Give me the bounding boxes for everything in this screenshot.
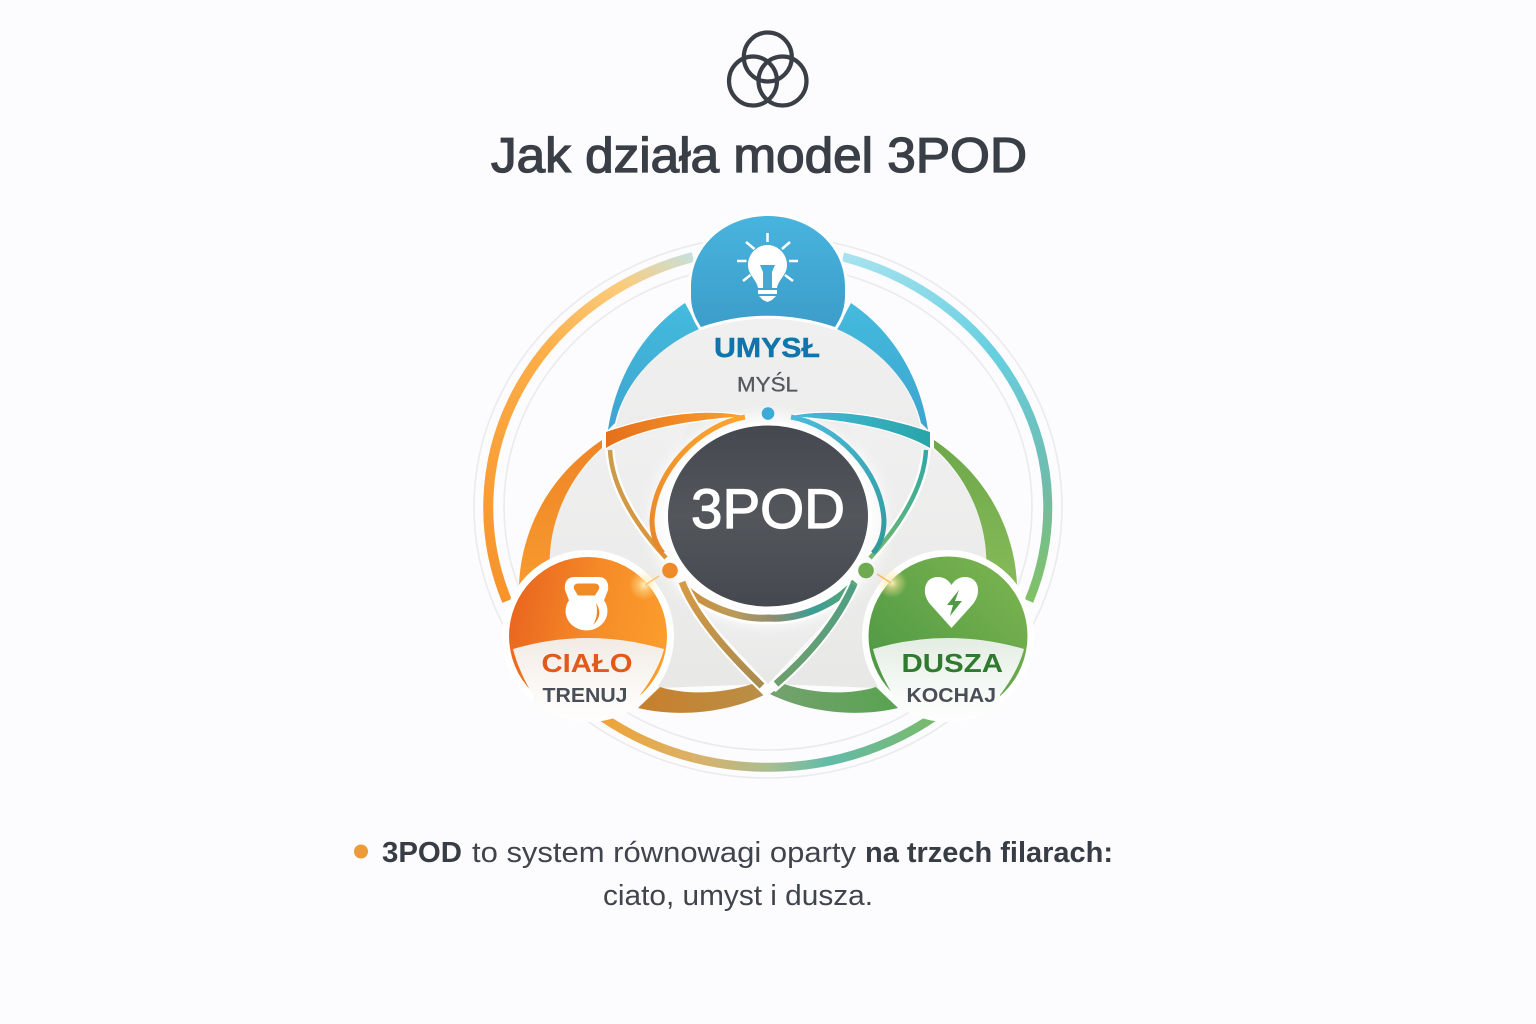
strand: thin orange around centre bbox=[652, 417, 745, 553]
crescent: blue petal left bbox=[608, 303, 699, 430]
crescent: bottom green bbox=[770, 684, 898, 713]
label: TRENUJ: TRENUJ bbox=[542, 685, 628, 707]
centre circle: 3POD bbox=[668, 426, 868, 606]
blue cap bbox=[691, 216, 845, 327]
description text: 3POD bbox=[382, 837, 462, 869]
white glow around the centre bbox=[650, 414, 886, 626]
description text bbox=[382, 837, 1113, 912]
description text: to system równowagi oparty bbox=[472, 837, 857, 869]
band: teal top arc bbox=[791, 413, 930, 448]
label: DUSZA: DUSZA bbox=[902, 648, 1003, 678]
arc: bottom gradient ring segment bbox=[590, 708, 946, 767]
pillar: CIAŁO bbox=[502, 550, 674, 726]
icon: heart with bolt bbox=[925, 577, 978, 628]
petal fills: grey interior areas bbox=[550, 316, 986, 688]
label: KOCHAJ: KOCHAJ bbox=[906, 685, 996, 707]
white halo bbox=[862, 550, 1034, 722]
dot and spark: green node bbox=[858, 563, 907, 598]
dot and spark: orange node bbox=[629, 563, 678, 600]
label: UMYSŁ: UMYSŁ bbox=[714, 332, 820, 363]
band: orange top arc bbox=[606, 413, 745, 448]
label: MYŚL: MYŚL bbox=[737, 372, 798, 396]
icon: light bulb bbox=[737, 233, 798, 302]
diagram: 3POD model bbox=[474, 216, 1062, 778]
orange disc bbox=[509, 557, 667, 715]
pillar: DUSZA bbox=[862, 550, 1034, 726]
crescent: blue petal right bbox=[837, 303, 928, 430]
white halo bbox=[502, 550, 674, 722]
strand: tan arc of the mind petal, left bbox=[610, 450, 666, 558]
crescent: orange petal outer bbox=[519, 440, 602, 585]
strand: bottom arc under centre bbox=[683, 582, 855, 618]
strand: green crossing bbox=[772, 584, 854, 688]
dot: blue node bbox=[762, 407, 774, 420]
bullet bbox=[354, 844, 368, 858]
crescent: bottom brown bbox=[638, 684, 766, 713]
arc: left orange ring segment bbox=[488, 257, 693, 601]
strand: tan crossing bbox=[682, 582, 768, 692]
label: CIAŁO: CIAŁO bbox=[542, 650, 632, 678]
arc: right teal ring segment bbox=[843, 257, 1048, 601]
strand: teal arc of the mind petal, right bbox=[870, 450, 926, 558]
centre circle: 3POD: 3POD bbox=[691, 477, 845, 540]
crescent: green petal outer bbox=[934, 440, 1017, 585]
title: Jak działa model 3POD bbox=[491, 129, 1027, 183]
white label cap bbox=[513, 638, 664, 726]
green disc bbox=[868, 556, 1028, 716]
outer decorative rings bbox=[474, 236, 1062, 778]
icon: three overlapping rings bbox=[729, 32, 806, 106]
pillar: UMYSŁ bbox=[691, 216, 845, 396]
white label cap bbox=[873, 638, 1024, 726]
description text: na trzech filarach: bbox=[865, 837, 1113, 869]
description text: ciato, umyst i dusza. bbox=[603, 880, 873, 912]
icon: kettlebell bbox=[565, 577, 608, 630]
strand: thin teal around centre bbox=[791, 417, 884, 553]
